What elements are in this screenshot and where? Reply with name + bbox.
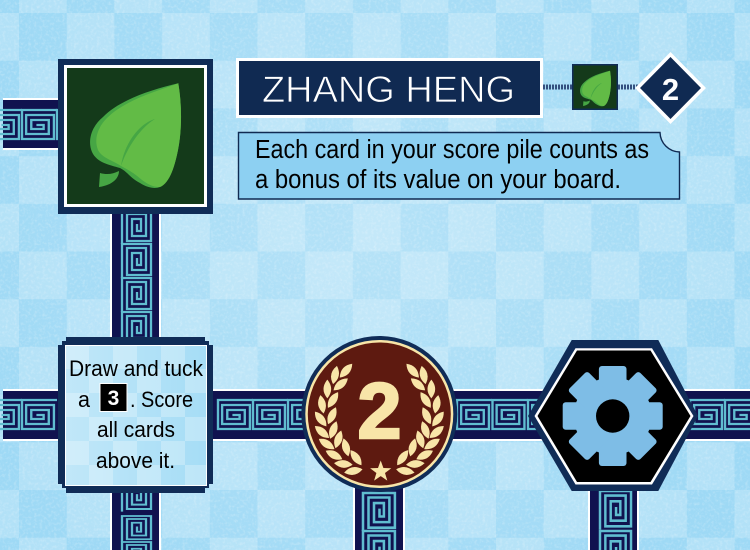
effect text lines: [69, 356, 204, 473]
effect text lines: above it.: [96, 448, 175, 473]
icon: large leaf card: [58, 59, 213, 214]
icon: age 3 inline badge: 3: [108, 387, 119, 410]
connector: vertical strip below hexagon: [588, 485, 639, 550]
connector: vertical strip below effect card: [110, 482, 161, 550]
title: card name banner: ZHANG HENG: [262, 69, 515, 110]
icon: hexagon gear: [528, 340, 698, 491]
effect text lines: . Score: [130, 387, 193, 412]
medal number: 2: [358, 366, 401, 455]
effect text lines: a: [78, 387, 90, 412]
connector: lower horizontal key-pattern strip: [0, 389, 750, 441]
icon: age diamond with number: 2: [662, 72, 679, 107]
panel: effect card: [58, 337, 213, 493]
title: card name banner: [236, 58, 543, 118]
effect text lines: all cards: [97, 417, 175, 442]
icon: age 3 inline badge: [100, 383, 128, 412]
icon: medal with laurel wreath and number: [301, 336, 457, 492]
connector: hatched line from title to age diamond: [543, 84, 640, 90]
effect text lines: Draw and tuck: [69, 356, 204, 381]
laurel wreath: [312, 361, 447, 476]
icon: small leaf badge: [572, 64, 618, 110]
connector: vertical strip below medal: [353, 485, 405, 550]
icon: age diamond with number: [635, 52, 706, 124]
medal star: [370, 460, 391, 481]
text block: dogma description: [238, 132, 680, 199]
connector: top left key-pattern strip: [0, 98, 92, 150]
text block: dogma description: a bonus of its value on your board.: [255, 166, 621, 194]
text block: dogma description: Each card in your score pile counts as: [255, 136, 649, 164]
connector: vertical strip between leaf card and effect card: [110, 205, 161, 346]
gear: [563, 366, 663, 466]
